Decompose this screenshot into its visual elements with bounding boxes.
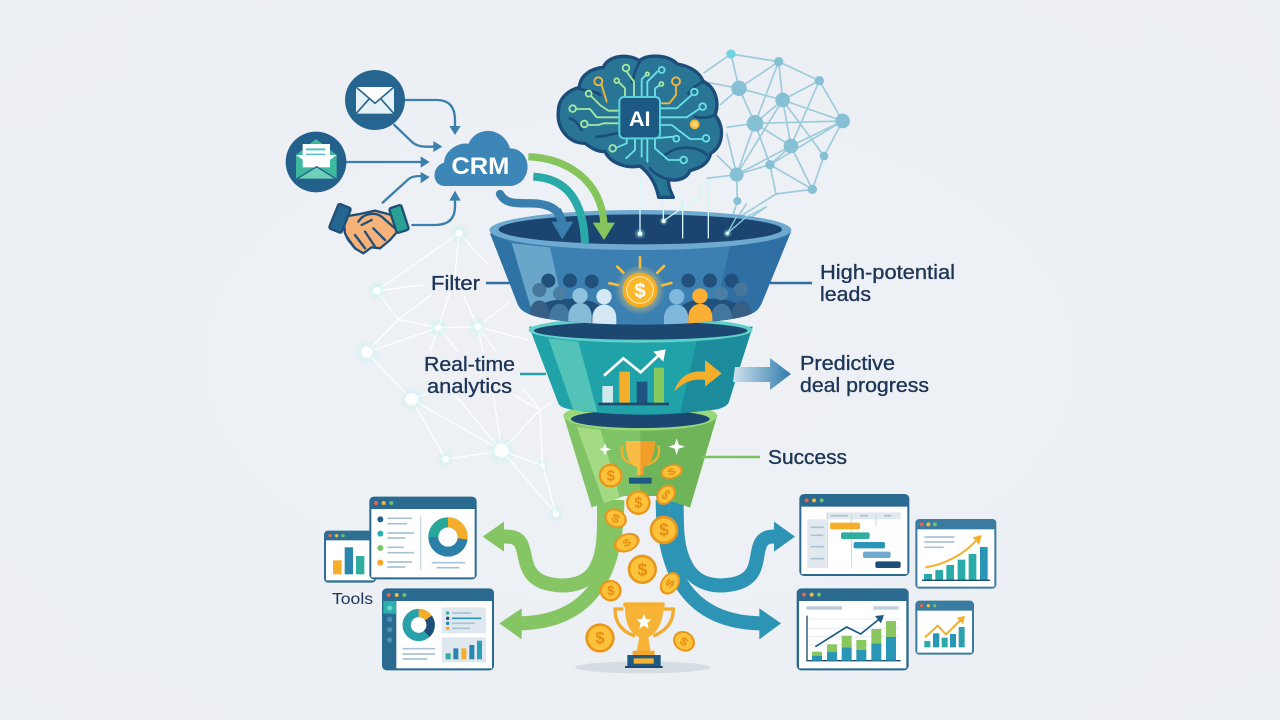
green funnel body xyxy=(563,415,717,507)
neural network, right of brain xyxy=(703,49,850,233)
funnel body xyxy=(490,232,791,325)
label: Predictive deal progress xyxy=(800,353,929,397)
icon: orange arrow xyxy=(674,360,722,392)
lead silhouettes xyxy=(529,274,752,327)
stacked bar window xyxy=(797,588,909,670)
label: Filter xyxy=(431,273,512,295)
small bar chart window xyxy=(324,531,376,583)
CRM inputs and cloud xyxy=(286,70,528,253)
white glowing network, left xyxy=(354,223,565,523)
coins beside trophy: $ xyxy=(677,634,690,649)
branching streams xyxy=(500,500,778,623)
brain folds xyxy=(570,62,715,179)
brain silhouette xyxy=(558,56,721,197)
label: Tools: Tools xyxy=(332,591,373,608)
falling coins xyxy=(599,462,684,601)
icon: mail circle xyxy=(345,70,405,130)
AI data beams xyxy=(634,173,767,240)
funnel stage 1: filter xyxy=(487,210,793,327)
arrow: to predictive deal progress xyxy=(733,358,791,390)
falling coins: $ xyxy=(662,576,677,590)
bar chart xyxy=(598,349,669,405)
connector arrows xyxy=(347,100,455,225)
falling coins: $ xyxy=(607,583,615,598)
label: Predictive deal progress: deal progress xyxy=(800,375,929,397)
label: High-potential leads xyxy=(770,262,955,306)
falling coins: $ xyxy=(637,559,647,579)
falling coins: $ xyxy=(621,536,633,550)
label: High-potential leads: leads xyxy=(820,284,871,306)
falling coins: $ xyxy=(634,496,642,512)
teal arrow xyxy=(533,177,585,243)
AI label: AI xyxy=(629,106,650,131)
sparkles xyxy=(599,438,685,455)
falling coins: $ xyxy=(609,511,623,526)
small trophy xyxy=(622,441,659,484)
green arrow xyxy=(528,157,615,240)
right tool windows xyxy=(797,494,996,670)
growth window xyxy=(915,519,996,589)
icon: handshake xyxy=(329,203,409,253)
inflow arrows into funnel xyxy=(528,157,615,243)
main donut window xyxy=(369,497,477,579)
label: Success: Success xyxy=(768,447,847,469)
coins beside trophy: $ xyxy=(595,629,605,648)
label: High-potential leads: High-potential xyxy=(820,262,955,284)
small line window xyxy=(915,601,974,655)
falling coins: $ xyxy=(607,469,615,485)
label: Real-time analytics: analytics xyxy=(427,376,512,398)
funnel inflow arrow: blue xyxy=(500,194,563,227)
CRM label: CRM xyxy=(451,153,509,180)
label: Real-time analytics xyxy=(424,354,546,398)
label: Real-time analytics: Real-time xyxy=(424,354,515,376)
CRM cloud xyxy=(434,131,528,186)
icon: newsletter circle xyxy=(286,132,346,192)
AI chip xyxy=(619,97,660,138)
label: Filter: Filter xyxy=(431,273,480,295)
falling coins: $ xyxy=(658,486,674,503)
funnel stage 2: analytics xyxy=(529,317,753,415)
left tool windows xyxy=(324,497,494,670)
base shadow xyxy=(575,661,710,673)
blue arrow xyxy=(552,210,573,239)
icon: glowing dollar coin: $ xyxy=(634,279,646,302)
gantt window xyxy=(799,494,909,576)
bottom dashboard window xyxy=(382,588,494,670)
coins beside trophy xyxy=(585,623,699,656)
icon: glowing dollar coin xyxy=(609,257,671,315)
funnel stage 3: success xyxy=(483,401,795,673)
falling coins: $ xyxy=(659,520,669,540)
large trophy xyxy=(615,602,673,668)
chip traces xyxy=(575,71,702,162)
label: Predictive deal progress: Predictive xyxy=(800,353,895,375)
falling coins: $ xyxy=(666,466,677,478)
icon: AI brain xyxy=(558,56,721,197)
